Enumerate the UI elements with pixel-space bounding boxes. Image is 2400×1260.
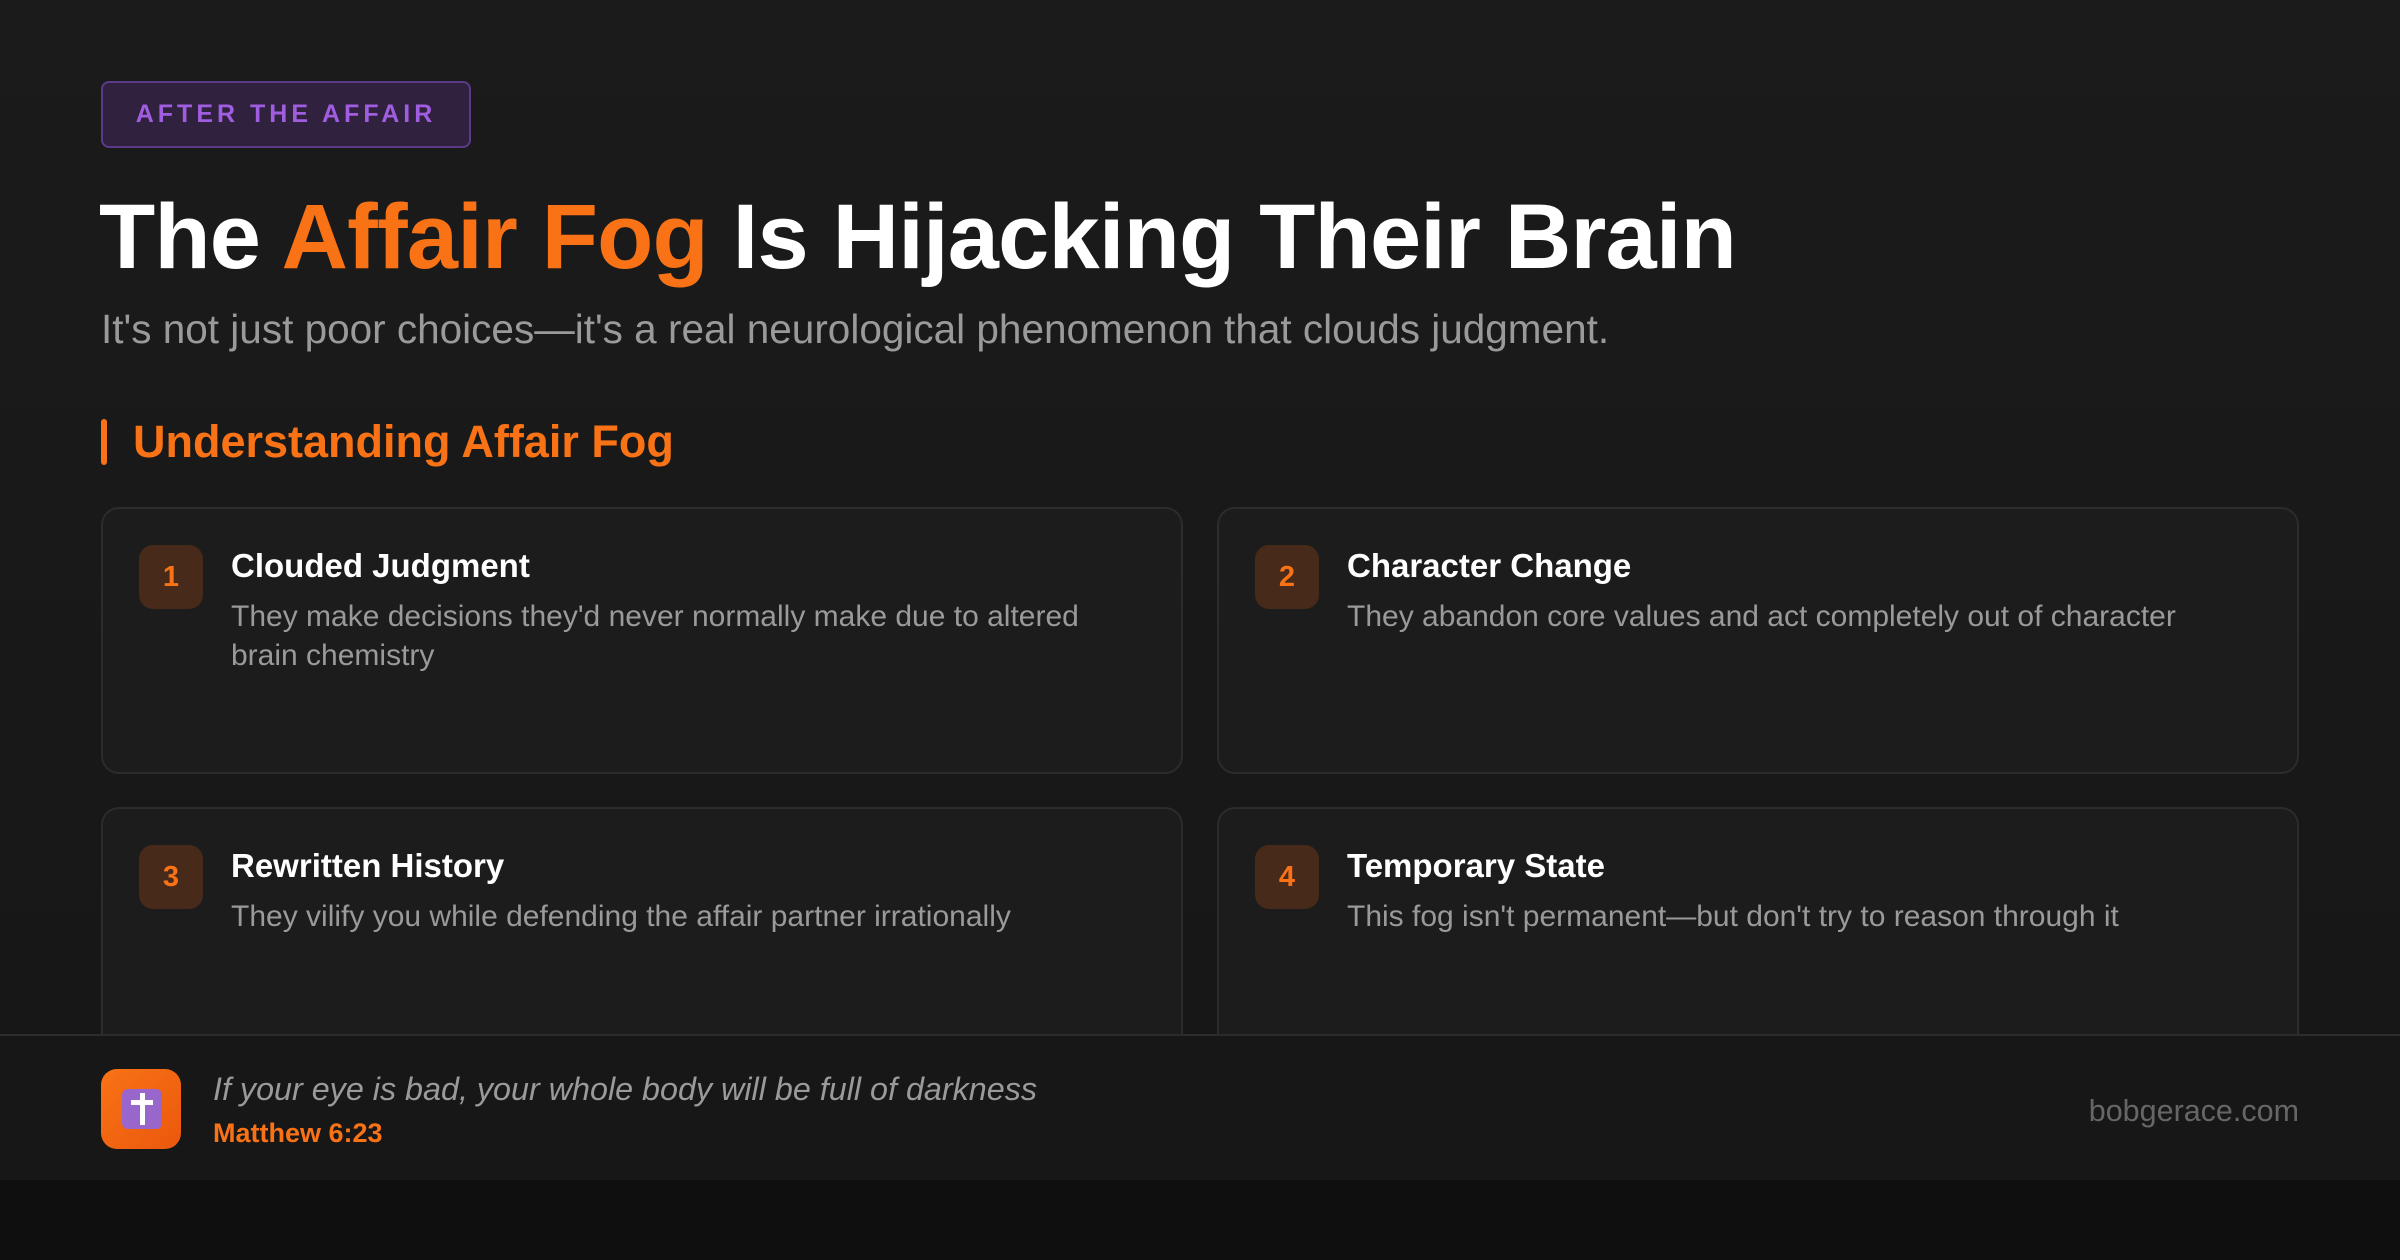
number 3 — [139, 845, 203, 909]
number 2 — [1255, 545, 1319, 609]
card 2 — [1217, 507, 2299, 774]
icon: cross — [101, 1069, 181, 1149]
badge — [101, 81, 471, 148]
card title 2: Character Change — [1347, 547, 1631, 584]
title: The Affair Fog Is Hijacking Their Brain — [99, 186, 1736, 288]
badge: AFTER THE AFFAIR — [136, 100, 436, 128]
card text 2: They abandon core values and act completely out of character — [1347, 600, 2176, 633]
number 4 — [1255, 845, 1319, 909]
card title 1: Clouded Judgment — [231, 547, 530, 584]
quote: If your eye is bad, your whole body will be full of darkness — [213, 1071, 1037, 1107]
section heading: Understanding Affair Fog — [133, 416, 674, 467]
number 2: 2 — [1279, 560, 1295, 592]
number 1: 1 — [163, 560, 179, 592]
card 1 — [101, 507, 1183, 774]
card text 3: They vilify you while defending the affair partner irrationally — [231, 900, 1011, 933]
card text 4: This fog isn't permanent—but don't try to reason through it — [1347, 900, 2119, 933]
card 3 — [101, 807, 1183, 1067]
card text 1: They make decisions they'd never normally make due to altered brain chemistry — [231, 600, 1079, 672]
number 1 — [139, 545, 203, 609]
number 3: 3 — [163, 860, 179, 892]
card title 4: Temporary State — [1347, 847, 1605, 884]
footer — [0, 1034, 2400, 1180]
number 4: 4 — [1279, 860, 1295, 892]
card title 3: Rewritten History — [231, 847, 504, 884]
card 4 — [1217, 807, 2299, 1067]
reference: Matthew 6:23 — [213, 1118, 383, 1148]
subtitle: It's not just poor choices—it's a real neurological phenomenon that clouds judgment. — [101, 306, 1609, 352]
website: bobgerace.com — [2089, 1094, 2299, 1128]
